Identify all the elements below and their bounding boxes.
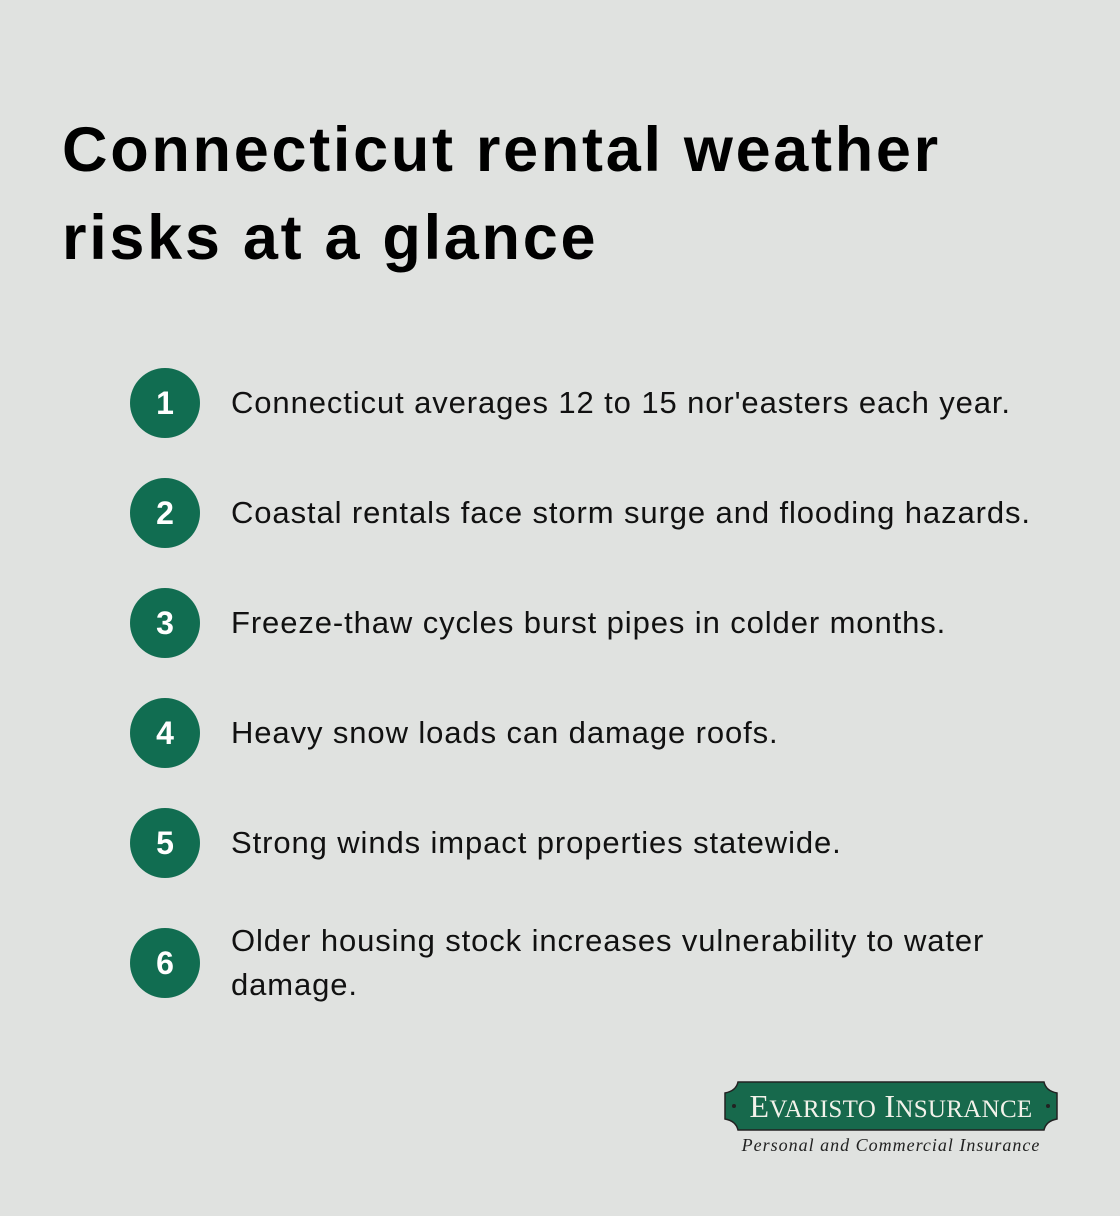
item 4	[130, 698, 779, 768]
item 5: Strong winds impact properties statewide.	[231, 825, 842, 860]
item 5	[130, 808, 842, 878]
item 3: 3	[156, 605, 174, 641]
item 4: Heavy snow loads can damage roofs.	[231, 715, 779, 750]
title: Connecticut rental weather	[62, 115, 941, 185]
item 4: 4	[156, 715, 174, 751]
item 3: Freeze-thaw cycles burst pipes in colder months.	[231, 605, 946, 640]
logo	[724, 1081, 1058, 1155]
item 1: Connecticut averages 12 to 15 nor'easters each year.	[231, 385, 1011, 420]
item 2: 2	[156, 495, 174, 531]
item 1	[130, 368, 1011, 438]
item 6: Older housing stock increases vulnerability to water damage.	[231, 923, 984, 1002]
item 1: 1	[156, 385, 174, 421]
tagline: Personal and Commercial Insurance	[742, 1135, 1040, 1155]
item 2: Coastal rentals face storm surge and flooding hazards.	[231, 495, 1031, 530]
title	[62, 115, 941, 273]
item 3	[130, 588, 946, 658]
item 6: 6	[156, 945, 174, 981]
item 5: 5	[156, 825, 174, 861]
logo plaque	[724, 1081, 1058, 1131]
title: risks at a glance	[62, 203, 598, 273]
logo plaque: EVARISTO INSURANCE	[749, 1088, 1033, 1124]
item 2	[130, 478, 1031, 548]
